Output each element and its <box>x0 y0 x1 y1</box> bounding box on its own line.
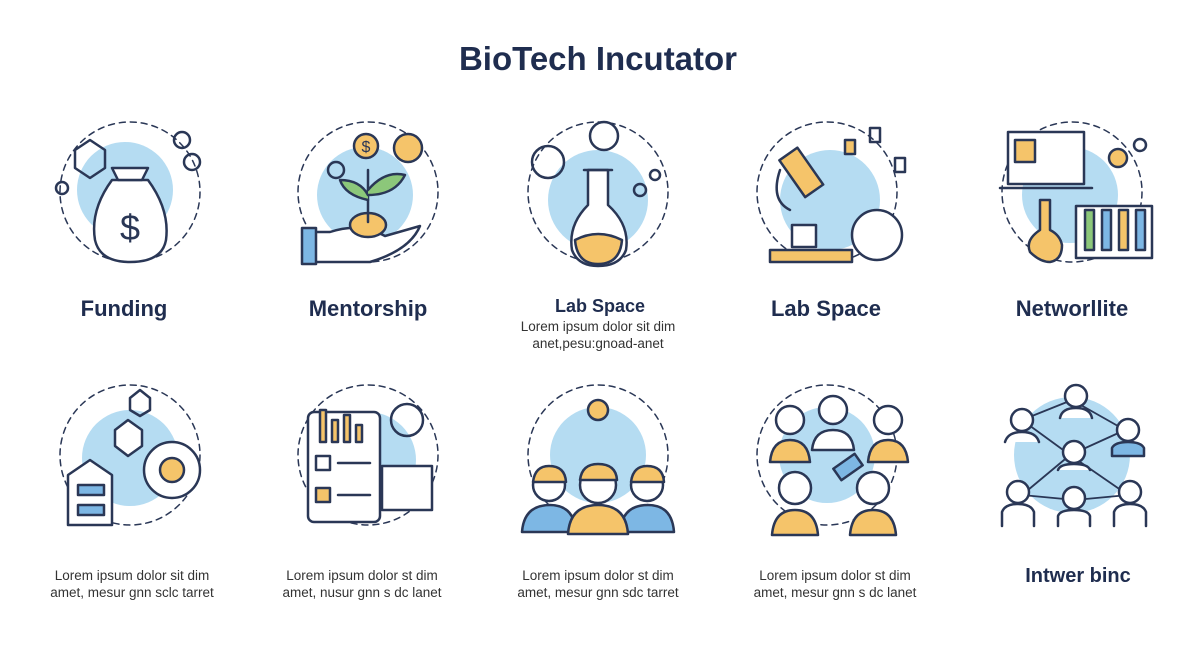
icon: checklist <box>298 385 438 525</box>
label: lab space 1: Lab Space <box>555 296 645 316</box>
label: intwer binc: Intwer binc <box>1025 565 1131 587</box>
text: description 2 <box>282 568 442 600</box>
text: description 3 <box>517 568 679 600</box>
text: lab space description: Lorem ipsum dolor sit dim <box>521 319 675 334</box>
icon: networking <box>1000 122 1152 262</box>
label: networking: Networllite <box>1016 296 1128 321</box>
icon: mentorship <box>298 122 438 264</box>
label: mentorship: Mentorship <box>309 296 427 321</box>
icon: microscope <box>757 122 905 262</box>
text: lab space description <box>521 319 675 351</box>
icon: team <box>522 385 674 534</box>
icon: collaboration <box>757 385 908 535</box>
text: description 2: Lorem ipsum dolor st dim <box>286 568 438 583</box>
icon: mentorship: $ <box>362 139 371 156</box>
text: description 2: amet, nusur gnn s dc lanet <box>282 585 442 600</box>
text: description 1: Lorem ipsum dolor sit dim <box>55 568 209 583</box>
text: description 4: Lorem ipsum dolor st dim <box>759 568 911 583</box>
text: description 3: Lorem ipsum dolor st dim <box>522 568 674 583</box>
icon: lab space flask <box>528 122 668 266</box>
label: lab space 2: Lab Space <box>771 296 881 321</box>
text: description 4 <box>754 568 916 600</box>
icon: network people <box>1002 385 1146 526</box>
title: BioTech Incutator <box>459 40 737 77</box>
icon: funding: $ <box>120 207 140 248</box>
icon: facility <box>60 385 200 525</box>
label: funding: Funding <box>81 296 167 321</box>
text: description 1: amet, mesur gnn sclc tarret <box>50 585 214 600</box>
text: description 4: amet, mesur gnn s dc lanet <box>754 585 916 600</box>
text: description 1 <box>50 568 214 600</box>
text: description 3: amet, mesur gnn sdc tarret <box>517 585 679 600</box>
icon: funding <box>56 122 200 262</box>
text: lab space description: anet,pesu:gnoad-anet <box>532 336 664 351</box>
